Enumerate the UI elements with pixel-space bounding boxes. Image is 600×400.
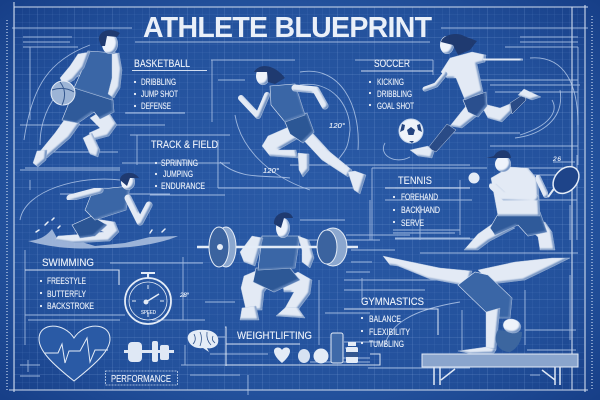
panel: swimming text: BACKSTROKE bbox=[47, 301, 94, 312]
legs bbox=[464, 222, 515, 250]
panel: performance label: PERFORMANCE bbox=[111, 374, 171, 385]
shorts bbox=[62, 88, 114, 123]
panel: basketball text: BASKETBALL bbox=[134, 58, 190, 70]
dimension label: 26 bbox=[552, 156, 561, 163]
icon: stopwatch: SPEED bbox=[141, 310, 156, 316]
icon: food bbox=[298, 349, 310, 363]
head bbox=[276, 218, 290, 238]
arms bbox=[493, 186, 535, 198]
panel: gymnastics text: BALANCE bbox=[369, 314, 401, 325]
icon: stopwatch bbox=[125, 273, 171, 324]
leotard bbox=[458, 272, 512, 318]
athlete: soccer player bbox=[399, 34, 541, 158]
panel: tennis text: SERVE bbox=[401, 218, 424, 229]
shorts bbox=[463, 92, 487, 117]
hand bbox=[458, 347, 496, 354]
athlete: swimmer bbox=[28, 173, 178, 249]
icon: heart bbox=[274, 347, 290, 363]
shorts bbox=[285, 113, 314, 143]
icon: supplement jar bbox=[346, 342, 358, 363]
water splash bbox=[28, 218, 178, 249]
icon: apple bbox=[314, 348, 328, 364]
head and ponytail bbox=[440, 36, 454, 54]
athlete: tennis player bbox=[464, 150, 584, 250]
legs bbox=[383, 256, 472, 286]
athlete: track and field runner bbox=[241, 66, 366, 194]
torso bbox=[85, 186, 130, 220]
head bbox=[501, 317, 523, 335]
support arm bbox=[486, 308, 500, 350]
panel: soccer text: DRIBBLING bbox=[377, 89, 412, 100]
arms bbox=[240, 236, 263, 266]
angle label: 28° bbox=[179, 291, 189, 299]
angle label: 120° bbox=[329, 121, 345, 130]
leg bbox=[55, 218, 119, 243]
panel: soccer text: KICKING bbox=[377, 77, 404, 88]
arms bbox=[60, 52, 90, 86]
panel: basketball text: DRIBBLING bbox=[141, 77, 176, 88]
athlete: gymnast on beam bbox=[383, 256, 578, 385]
torso bbox=[258, 236, 300, 270]
panel: performance label bbox=[106, 371, 178, 385]
panel: basketball text: DEFENSE bbox=[141, 101, 171, 112]
legs bbox=[241, 270, 274, 310]
shoes bbox=[240, 306, 259, 320]
shirt bbox=[491, 167, 540, 216]
panel: swimming text: BUTTERFLY bbox=[47, 289, 86, 300]
head bbox=[102, 34, 118, 54]
panel: track and field text: JUMPING bbox=[163, 169, 193, 180]
panel: gymnastics text: FLEXIBILITY bbox=[369, 327, 410, 338]
panel: weightlifting label and nutrition icons bbox=[225, 327, 380, 366]
icon: heart with pulse bbox=[39, 326, 110, 381]
panel: swimming text bbox=[25, 257, 119, 312]
panel: basketball text bbox=[125, 58, 207, 113]
standing leg bbox=[450, 106, 482, 128]
panel: gymnastics text: GYMNASTICS bbox=[361, 296, 424, 308]
athlete: weightlifter bbox=[197, 212, 358, 320]
icon: water bottle bbox=[331, 333, 343, 363]
jersey bbox=[74, 51, 119, 100]
title: ATHLETE BLUEPRINT bbox=[143, 12, 433, 44]
icon: brain bbox=[188, 330, 218, 352]
panel: soccer text: GOAL SHOT bbox=[377, 101, 414, 112]
panel: soccer text: SOCCER bbox=[374, 58, 410, 70]
tennis ball bbox=[468, 172, 480, 184]
panel: track and field text: TRACK & FIELD bbox=[151, 139, 218, 151]
rear leg bbox=[294, 128, 352, 177]
shorts bbox=[253, 268, 300, 292]
top bbox=[270, 84, 305, 122]
shorts bbox=[490, 212, 547, 236]
shorts bbox=[72, 216, 107, 238]
panel: tennis text: TENNIS bbox=[398, 175, 432, 187]
soccer ball bbox=[399, 119, 423, 143]
panel: track and field text: SPRINTING bbox=[161, 158, 198, 169]
racket bbox=[548, 161, 584, 199]
arms bbox=[486, 59, 520, 60]
head with cap bbox=[495, 156, 511, 172]
head bbox=[121, 174, 135, 190]
athlete: basketball player bbox=[33, 30, 122, 167]
panel: swimming text: FREESTYLE bbox=[47, 276, 86, 287]
angle label: 120° bbox=[263, 166, 279, 175]
hair bbox=[496, 330, 522, 352]
rear leg bbox=[37, 119, 80, 158]
panel: gymnastics text: TUMBLING bbox=[369, 339, 404, 350]
panel: tennis text: BACKHAND bbox=[401, 205, 440, 216]
panel: swimming text: SWIMMING bbox=[42, 257, 94, 269]
panel: track and field text bbox=[151, 139, 218, 192]
panel: track and field text: ENDURANCE bbox=[161, 181, 205, 192]
panel: basketball text: JUMP SHOT bbox=[141, 89, 178, 100]
panel: tennis text bbox=[385, 175, 470, 229]
icon: dumbbell bbox=[124, 341, 174, 362]
panel: tennis text: FOREHAND bbox=[401, 192, 438, 203]
kicking leg bbox=[480, 103, 512, 122]
front leg bbox=[262, 122, 304, 158]
panel: weightlifting label and nutrition icons: WEIGHTLIFTING bbox=[237, 330, 312, 342]
balance beam bbox=[422, 354, 578, 385]
barbell bbox=[197, 227, 358, 267]
arms bbox=[241, 95, 267, 116]
shirt bbox=[441, 52, 486, 100]
panel: soccer text bbox=[361, 58, 433, 112]
basketball bbox=[51, 81, 75, 105]
arms bbox=[70, 190, 100, 198]
head bbox=[256, 67, 270, 85]
panel: gymnastics text bbox=[344, 296, 438, 350]
front leg bbox=[89, 108, 117, 140]
